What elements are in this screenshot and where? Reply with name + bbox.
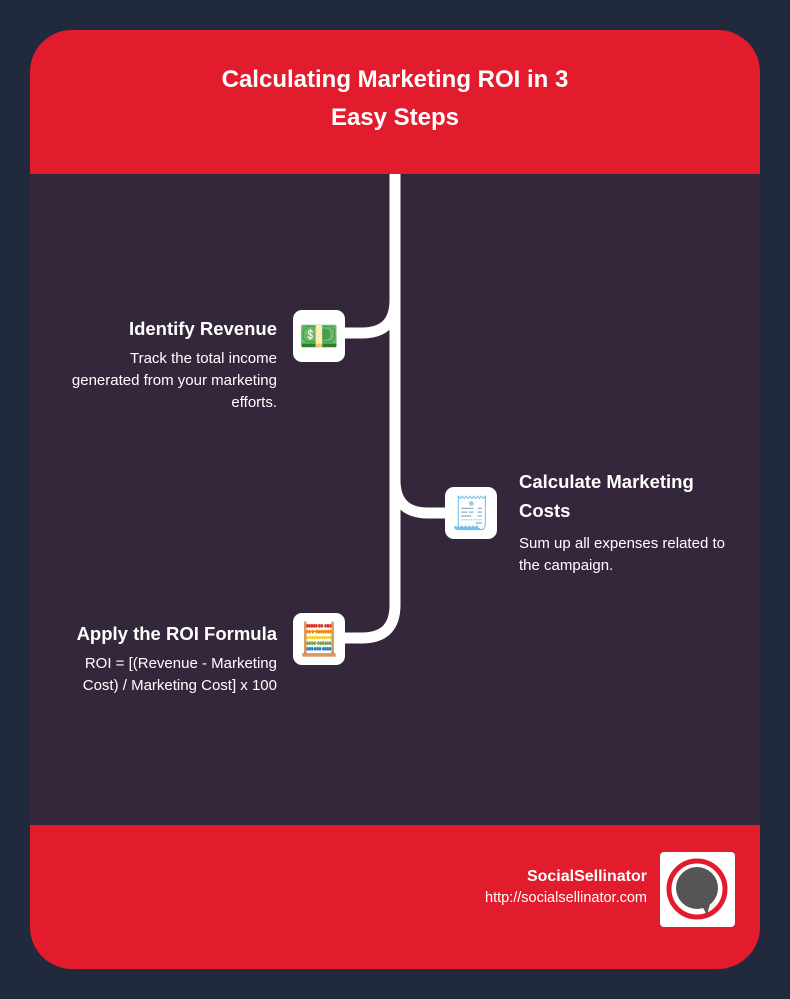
footer brand text: SocialSellinator — [527, 868, 647, 885]
step 3 text: ROI = [(Revenue - Marketing Cost) / Marketing Cost] x 100 — [83, 655, 277, 694]
icon: money — [293, 310, 345, 362]
step 2 text — [519, 471, 725, 574]
step 3 text: Apply the ROI Formula — [77, 623, 277, 644]
logo — [660, 852, 735, 927]
icon: money: 💵 — [299, 318, 339, 354]
footer brand text — [485, 868, 647, 906]
step 1 text — [72, 318, 277, 411]
step 1 text: Identify Revenue — [129, 318, 277, 339]
icon: abacus: 🧮 — [299, 621, 339, 657]
step 2 text: Sum up all expenses related to the campaign. — [519, 535, 725, 574]
step 2 text: Calculate Marketing Costs — [519, 471, 694, 521]
footer band — [30, 825, 760, 969]
footer brand text: http://socialsellinator.com — [485, 890, 647, 906]
title — [222, 66, 568, 131]
icon: receipt: 🧾 — [451, 495, 491, 531]
title: Calculating Marketing ROI in 3 — [222, 66, 568, 93]
icon: abacus — [293, 613, 345, 665]
step 1 text: Track the total income generated from your marketing efforts. — [72, 350, 277, 411]
step 3 text — [77, 623, 278, 694]
header band — [30, 30, 760, 174]
title: Easy Steps — [331, 104, 459, 131]
icon: receipt — [445, 487, 497, 539]
